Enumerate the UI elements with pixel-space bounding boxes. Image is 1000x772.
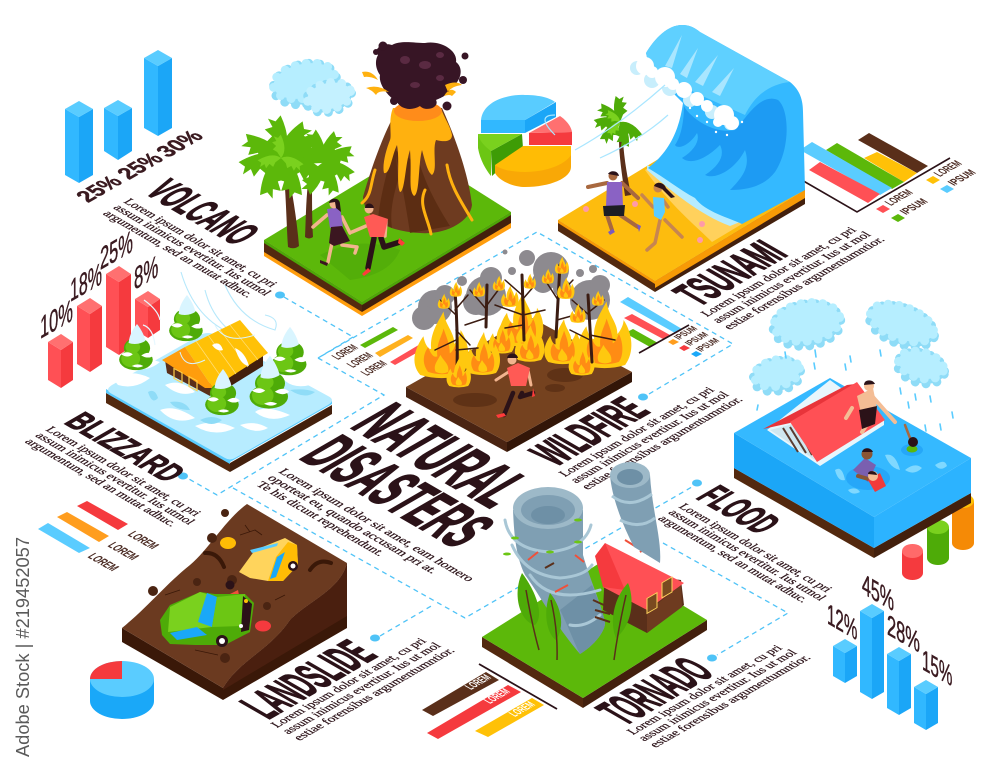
chart: blue bars top left: 25%	[70, 172, 128, 206]
chart: blue bars bottom right: 12%	[827, 598, 857, 648]
text: blizzard: Lorem ipsum dolor sit amet, cu pri	[42, 424, 205, 518]
chart: wildfire left bars: LOREM	[328, 342, 361, 362]
volcano platform	[264, 150, 511, 316]
chart: blue bars top left	[65, 50, 209, 206]
text: flood: Lorem ipsum dolor sit amet, cu pri	[675, 501, 836, 594]
pine tree	[250, 356, 289, 409]
chart: blue bars top left: 25%	[111, 149, 169, 183]
chart: wildfire left bars: LOREM	[343, 350, 376, 370]
text: tornado: Lorem ipsum dolor sit amet, cu pri	[623, 643, 786, 737]
text: volcano: assum inimicus evertitur. Ius utmol	[110, 202, 275, 298]
chart: blue bars bottom right: 45%	[862, 568, 894, 619]
lava flow	[383, 108, 452, 196]
wind lines	[181, 272, 276, 345]
runner	[496, 354, 535, 418]
chart: cylinders	[902, 494, 974, 580]
chart: wildfire left bars	[328, 327, 427, 378]
landslide top face	[122, 504, 347, 688]
blizzard platform	[106, 333, 332, 472]
chart: blue bars bottom right: 28%	[887, 609, 920, 660]
text: tornado: estiae forensibus argumentumntior.	[646, 652, 814, 750]
chart: red bars	[40, 223, 160, 388]
shells	[583, 201, 705, 243]
man on roof	[846, 380, 895, 432]
intro text: oporteat eu, quando accusam pri at.	[264, 473, 442, 576]
connector lines	[189, 232, 788, 655]
text: tsunami: estiae forensibus argumentumntior.	[720, 234, 888, 332]
panel: tornado scene	[482, 487, 707, 708]
heading: flood: FLOOD	[687, 480, 789, 540]
panel: tsunami scene	[545, 25, 805, 292]
palm	[594, 96, 644, 196]
text: blizzard: assum inimicus evertitur. Ius utmol	[32, 430, 199, 527]
chart: red bars: 10%	[40, 292, 73, 346]
panel: blizzard scene	[106, 272, 332, 472]
text: volcano: argumentum, sed an mutat adhuc.	[100, 208, 257, 300]
foam	[630, 61, 736, 130]
text: wildfire: assum inimicus evertitur. Ius ut mol	[567, 389, 733, 485]
heading: natural disasters: NATURAL	[335, 393, 550, 517]
chart: wildfire right bars: IPSUM	[683, 331, 712, 348]
text: landslide: Lorem ipsum dolor sit amet, cu pri	[267, 636, 430, 730]
runner woman	[642, 183, 682, 250]
text: tsunami: assum inimicus evertitur. Ius ut mol	[709, 229, 875, 325]
chart: tsunami bars: IPSUM	[896, 196, 931, 217]
crater	[394, 101, 442, 121]
red rock	[255, 620, 271, 632]
pine tree	[119, 324, 154, 370]
lava streams	[362, 165, 472, 234]
chart: wildfire right bars: IPSUM	[672, 325, 701, 342]
pine tree	[169, 295, 204, 341]
front flame	[447, 357, 471, 387]
chart: wildfire right bars: IPSUM	[694, 337, 723, 354]
heading: tsunami: TSUNAMI	[662, 233, 798, 312]
text: wildfire: estiae forensibus argumentumntior.	[578, 394, 746, 492]
tree-top flames	[438, 257, 604, 323]
chart: blizzard bars	[38, 501, 163, 573]
tornado platform	[482, 559, 707, 708]
swimmers	[846, 425, 923, 492]
flying leaves	[503, 518, 582, 556]
trees	[518, 573, 632, 660]
chart: pie top center	[478, 95, 572, 187]
chart: red bars: 18%	[70, 255, 102, 309]
house	[595, 543, 684, 633]
panel: landslide scene	[122, 504, 347, 700]
pine tree	[205, 369, 240, 415]
volcano cone	[363, 108, 472, 233]
wind swirl over red bar	[143, 300, 160, 345]
clouds near volcano	[270, 58, 354, 116]
landslide side face	[223, 563, 347, 690]
heading: natural disasters: DISASTERS	[284, 426, 510, 557]
text: landslide: assum inimicus evertitur. Ius ut mol	[279, 640, 445, 736]
green car	[160, 592, 254, 647]
chart: blue bars bottom right	[827, 568, 952, 730]
smoke cloud	[373, 42, 468, 110]
running man	[352, 204, 405, 276]
palm trees	[238, 115, 357, 248]
runner man	[588, 171, 641, 235]
text: wildfire: Lorem ipsum dolor sit amet, cu pri	[555, 385, 718, 479]
chart: tsunami bars: LOREM	[930, 158, 965, 179]
intro text: Te his dicunt reprehendunt.	[253, 479, 389, 558]
intro text: Lorem ipsum dolor sit amet, eam homero	[275, 466, 478, 584]
chart: blue bars top left: 30%	[150, 126, 209, 161]
chart: red bars: 25%	[100, 223, 133, 277]
text: tsunami: Lorem ipsum dolor sit amet, cu pri	[697, 225, 860, 319]
chart: tornado bars: LOREM	[461, 672, 494, 692]
back flames	[414, 293, 631, 378]
chart: wildfire left bars: LOREM	[357, 358, 390, 378]
tsunami platform	[558, 129, 805, 292]
wildfire platform	[406, 317, 632, 452]
heading: blizzard: BLIZZARD	[56, 407, 194, 487]
chart: wildfire right bars	[620, 297, 723, 357]
house	[162, 320, 268, 397]
stock watermark: Adobe Stock | #219452057	[13, 537, 33, 757]
heading: landslide: LANDSLIDE	[228, 633, 388, 726]
chart: tsunami bars: LOREM	[881, 187, 916, 208]
text: tornado: assum inimicus evertitur. Ius ut mol	[635, 647, 801, 743]
debris	[528, 540, 650, 592]
text: flood: argumentum, sed an mutat adhuc.	[655, 513, 812, 605]
panel: wildfire scene	[406, 250, 632, 452]
big funnel	[505, 487, 605, 654]
text: volcano: Lorem ipsum dolor sit amet, cu pri	[120, 196, 281, 289]
chart: blizzard bars: LOREM	[124, 529, 163, 551]
running woman	[313, 199, 357, 266]
person in mud	[224, 580, 240, 604]
chart: blizzard bars: LOREM	[84, 551, 123, 573]
small funnel overlapping wildfire text	[610, 462, 660, 563]
chart: tornado bars: LOREM	[505, 699, 538, 719]
heading: natural disasters	[284, 393, 550, 557]
panel: flood scene	[734, 297, 971, 558]
mud details	[148, 509, 331, 663]
heading: tornado: TORNADO	[585, 650, 726, 732]
connector dots	[178, 292, 717, 662]
chart: tsunami bars	[800, 133, 979, 222]
panel: volcano scene	[238, 42, 511, 316]
heading: wildfire: WILDFIRE	[520, 391, 661, 473]
flood platform	[734, 378, 971, 558]
chart: tornado bars	[422, 664, 557, 739]
chart: blizzard bars: LOREM	[104, 540, 143, 562]
yellow car	[239, 538, 298, 581]
clouds and rain	[750, 297, 953, 431]
chart: tsunami bars: IPSUM	[944, 167, 979, 188]
heading: volcano: VOLCANO	[135, 173, 270, 251]
chart: red bars: 8%	[134, 248, 158, 297]
submerged house	[763, 380, 885, 466]
text: flood: assum inimicus evertitur. Ius utmol	[665, 507, 830, 603]
yellow rock	[220, 537, 236, 549]
chart: tornado bars: LOREM	[480, 686, 513, 706]
slope sides	[122, 563, 347, 700]
chart: blue bars bottom right: 15%	[922, 644, 952, 694]
volcano shading	[378, 140, 450, 233]
wind lines	[545, 85, 668, 158]
pine tree	[271, 327, 308, 375]
text: landslide: estiae forensibus argumentumntior.	[290, 645, 458, 743]
burnt trees	[435, 265, 615, 373]
lava splashes	[362, 72, 462, 96]
wave	[627, 25, 805, 224]
chart: landslide pie	[90, 661, 154, 719]
smoke	[412, 250, 610, 330]
text: blizzard: argumentum, sed an mutat adhuc.	[22, 436, 181, 529]
